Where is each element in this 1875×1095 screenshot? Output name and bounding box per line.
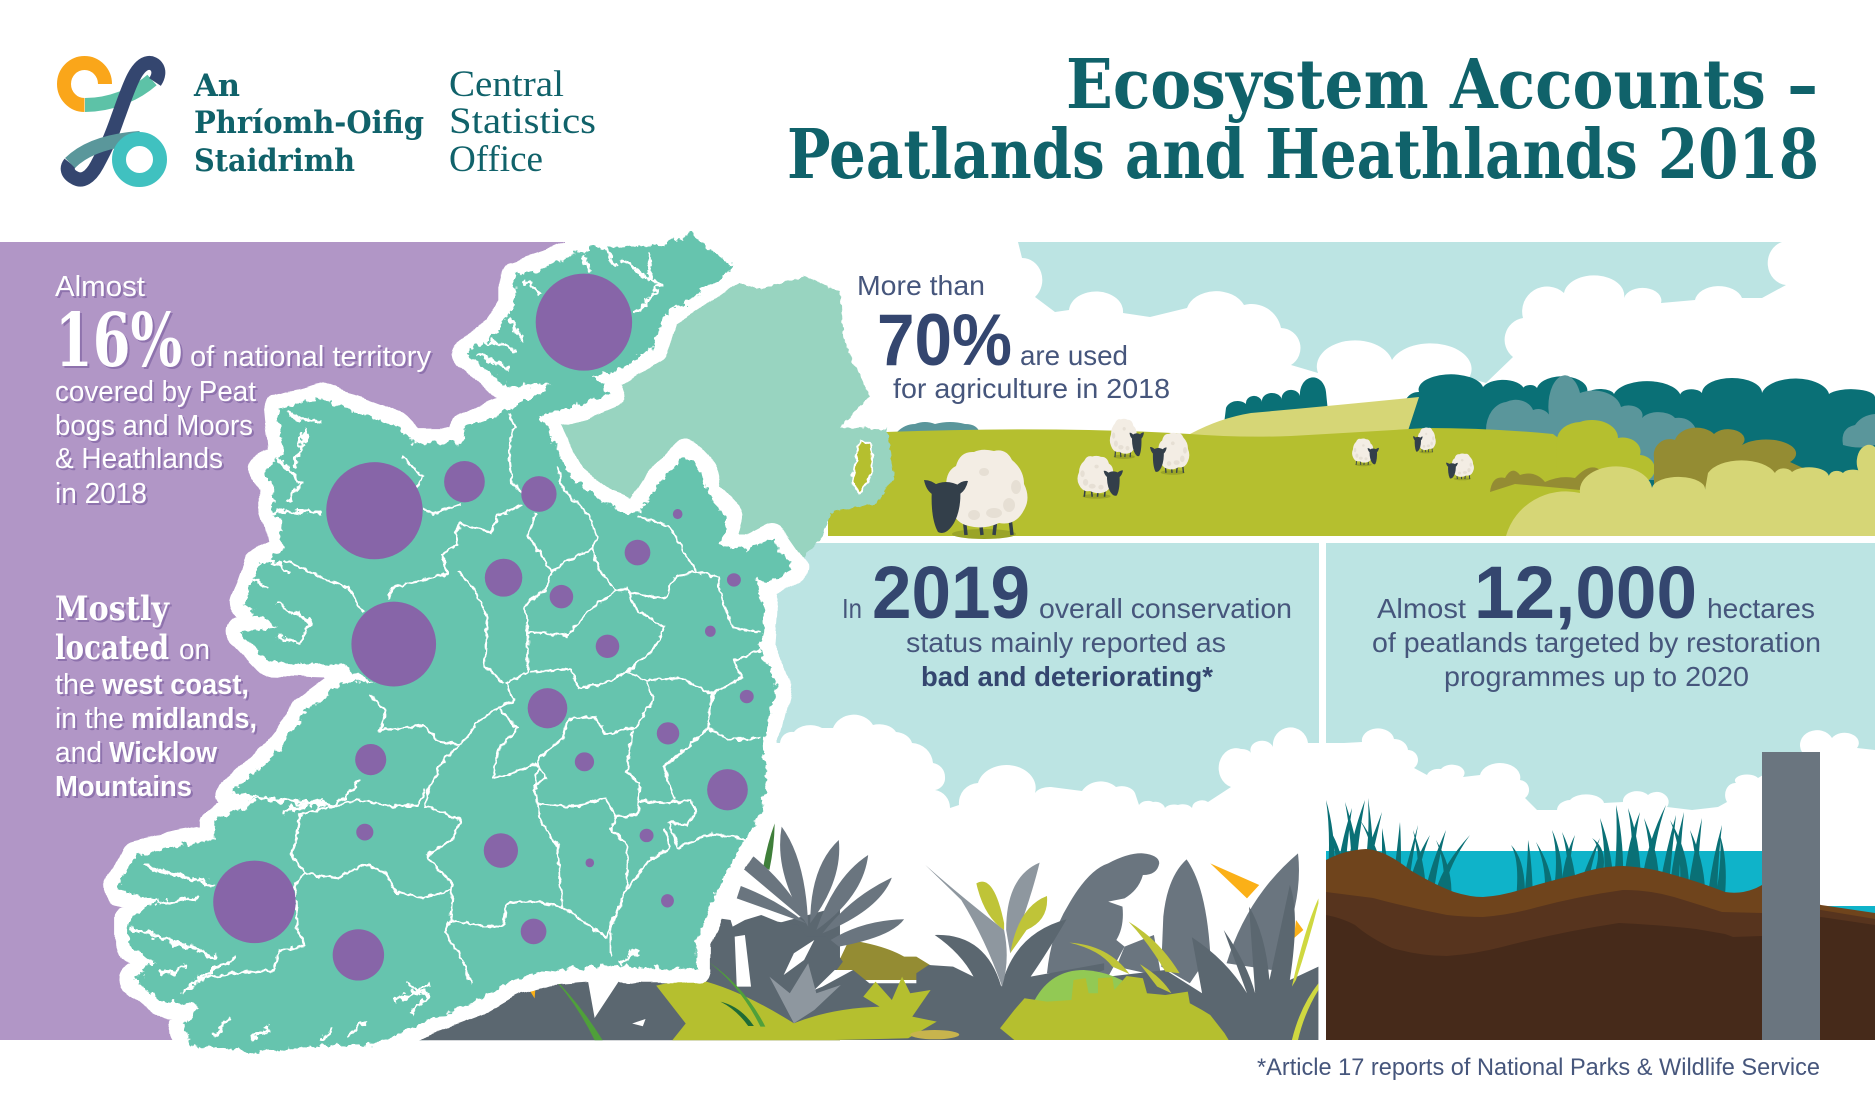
light foreground bush bbox=[1506, 445, 1875, 536]
sheep bbox=[1446, 454, 1474, 480]
logo: grey-teal swoosh bbox=[70, 138, 140, 163]
title bbox=[787, 45, 1819, 195]
dark foliage bbox=[418, 906, 840, 1040]
panel: purple background bbox=[0, 242, 565, 1040]
olive leaf bbox=[1010, 896, 1047, 953]
county circles bbox=[213, 274, 754, 981]
text: 2019 conservation status: In bbox=[842, 593, 862, 624]
logo: cyan ring bbox=[119, 139, 160, 180]
text: mostly located: the bbox=[55, 669, 95, 701]
green blade bbox=[707, 962, 766, 1026]
olive blade bbox=[1140, 964, 1171, 993]
text: 16% of national territory: 16% bbox=[55, 298, 182, 384]
gold stone bbox=[910, 1030, 959, 1039]
panel: peat restoration bbox=[1326, 543, 1875, 1040]
text: 70% agriculture bbox=[857, 270, 1170, 404]
text: mostly located bbox=[55, 589, 257, 803]
measuring post bbox=[1762, 752, 1820, 1040]
text: 16% of national territory: covered by Peat bbox=[55, 376, 256, 408]
logo text: Irish name: Staidrimh bbox=[194, 143, 355, 179]
text: 16% of national territory: in 2018 bbox=[55, 478, 147, 510]
text: 12,000 hectares: Almost bbox=[1377, 593, 1466, 624]
clouds bbox=[1326, 728, 1875, 1040]
text: mostly located: located bbox=[55, 628, 169, 668]
sky sliver bbox=[375, 1024, 429, 1040]
logo text: Irish name: Phríomh-Oifig bbox=[194, 105, 424, 141]
clouds bbox=[1018, 242, 1875, 536]
small back leaf bbox=[1116, 935, 1161, 977]
text: 16% of national territory: bogs and Moors bbox=[55, 410, 253, 442]
text: 12,000 hectares: programmes up to 2020 bbox=[1444, 661, 1749, 692]
text: 70% agriculture: for agriculture in 2018 bbox=[893, 373, 1170, 404]
dark foliage base bbox=[700, 885, 1318, 1040]
logo text: Irish name: An bbox=[193, 68, 240, 104]
text: mostly located: Wicklow bbox=[109, 737, 217, 769]
text: 2019 conservation status bbox=[842, 551, 1292, 692]
logo: navy loop bbox=[68, 63, 158, 179]
dark green blade bbox=[720, 1002, 754, 1026]
coastal inlets bbox=[134, 248, 662, 1040]
logo text: English name bbox=[449, 64, 596, 180]
text: 12,000 hectares bbox=[1372, 551, 1821, 692]
illustration: foliage bbox=[700, 823, 1318, 1040]
sheep bbox=[1150, 433, 1189, 475]
coast halo bbox=[118, 234, 793, 1051]
orange leaf bbox=[528, 984, 536, 998]
left olive ground plant bbox=[700, 977, 937, 1040]
Strangford lough bbox=[852, 440, 873, 493]
peat layer: middle bbox=[1326, 890, 1875, 1040]
title: Ecosystem Accounts – bbox=[1066, 45, 1818, 125]
text: 2019 conservation status: bad and deteriorating* bbox=[921, 661, 1213, 692]
green bush bbox=[1556, 420, 1655, 500]
dark trees bbox=[1404, 374, 1875, 530]
logo text: Irish name bbox=[193, 68, 424, 179]
fan palm bbox=[737, 827, 904, 947]
grey small plant bbox=[769, 963, 841, 1023]
reeds bbox=[1326, 798, 1726, 900]
text: 70% agriculture: More than bbox=[857, 270, 985, 301]
olive leaf bbox=[976, 882, 1004, 930]
sheep bbox=[1110, 419, 1144, 459]
olive blade bbox=[1129, 922, 1180, 973]
water bbox=[1326, 851, 1762, 911]
text: 16% of national territory bbox=[55, 271, 432, 510]
text: 16% of national territory: & Heathlands bbox=[55, 443, 223, 475]
sheep flock bbox=[924, 419, 1474, 539]
logo text: English name: Office bbox=[449, 139, 543, 180]
land bbox=[118, 234, 793, 1051]
plants under Ireland bbox=[375, 906, 840, 1040]
logo text: English name: Central bbox=[449, 64, 564, 105]
sheep bbox=[924, 450, 1028, 539]
clouds bbox=[700, 715, 1319, 1040]
olive monstera bbox=[1000, 976, 1229, 1040]
mid trees right bbox=[1842, 414, 1875, 448]
tall green blade bbox=[763, 823, 775, 870]
sheep bbox=[1352, 439, 1379, 466]
tall spike leaf bbox=[1161, 859, 1210, 983]
text: mostly located: west coast, bbox=[101, 669, 249, 701]
sheep bbox=[1413, 427, 1436, 453]
logo bbox=[64, 63, 160, 180]
white gaps in foliage bbox=[735, 935, 853, 990]
banana leaf bbox=[1047, 853, 1159, 977]
green blob bbox=[1035, 970, 1145, 1007]
white gap in foliage bbox=[587, 973, 646, 1026]
text: 12,000 hectares: 12,000 bbox=[1474, 551, 1697, 634]
text: mostly located: and bbox=[55, 737, 102, 769]
text: mostly located: on bbox=[179, 634, 210, 666]
text: 2019 conservation status: status mainly reported as bbox=[906, 627, 1226, 658]
grass field bbox=[828, 428, 1640, 536]
footnote: *Article 17 reports of National Parks & Wildlife Service bbox=[1257, 1054, 1820, 1081]
green blade bbox=[546, 971, 603, 1040]
text: mostly located: in the bbox=[55, 703, 124, 735]
county borders bbox=[198, 413, 761, 984]
text: mostly located: midlands, bbox=[131, 703, 257, 735]
olive back plant bbox=[835, 940, 933, 980]
light hill bbox=[1190, 397, 1419, 440]
map of Ireland bbox=[118, 234, 894, 1051]
right big leaf bbox=[1227, 853, 1299, 970]
text: 16% of national territory: of national territory bbox=[190, 341, 432, 373]
sky bbox=[1018, 242, 1788, 536]
grey upper leaf bbox=[1006, 863, 1040, 953]
text: 16% of national territory: Almost bbox=[55, 271, 145, 303]
olive hedge bbox=[1490, 467, 1660, 496]
olive foliage bbox=[656, 981, 840, 1040]
small distant tree bbox=[1224, 377, 1328, 424]
peat layer: bottom bbox=[1326, 915, 1875, 1040]
logo: orange arc bbox=[64, 63, 105, 105]
logo text: English name: Statistics bbox=[449, 101, 596, 142]
text: 2019 conservation status: overall conservation bbox=[1039, 593, 1292, 624]
Northern Ireland bbox=[541, 276, 894, 569]
mid trees bbox=[1486, 375, 1696, 480]
orange bird of paradise bbox=[1210, 863, 1303, 938]
olive blade bbox=[1069, 943, 1129, 974]
green curved blade bbox=[708, 962, 765, 1027]
sky bbox=[1326, 543, 1875, 843]
text: mostly located: Mountains bbox=[55, 771, 192, 803]
text: 70% agriculture: are used bbox=[1020, 340, 1128, 371]
text: 12,000 hectares: of peatlands targeted by restoration bbox=[1372, 627, 1821, 658]
text: mostly located: Mostly bbox=[55, 589, 170, 629]
distant hedge bbox=[897, 422, 980, 434]
divider bbox=[1319, 556, 1326, 1040]
panel: conservation status bbox=[700, 543, 1319, 1040]
logo: green swoosh bbox=[85, 80, 152, 105]
olive bush bbox=[1654, 428, 1803, 490]
text: 2019 conservation status: 2019 bbox=[872, 551, 1030, 634]
sky bbox=[700, 543, 1319, 843]
peat layer: top bbox=[1326, 849, 1875, 1040]
text: 70% agriculture: 70% bbox=[877, 300, 1012, 381]
panel: agriculture landscape bbox=[828, 242, 1875, 539]
water right of post bbox=[1820, 906, 1875, 918]
sheep bbox=[1077, 456, 1123, 499]
grey centre leaf bbox=[925, 865, 1007, 987]
text: 12,000 hectares: hectares bbox=[1707, 593, 1815, 624]
yellow blades bbox=[1292, 898, 1318, 1040]
